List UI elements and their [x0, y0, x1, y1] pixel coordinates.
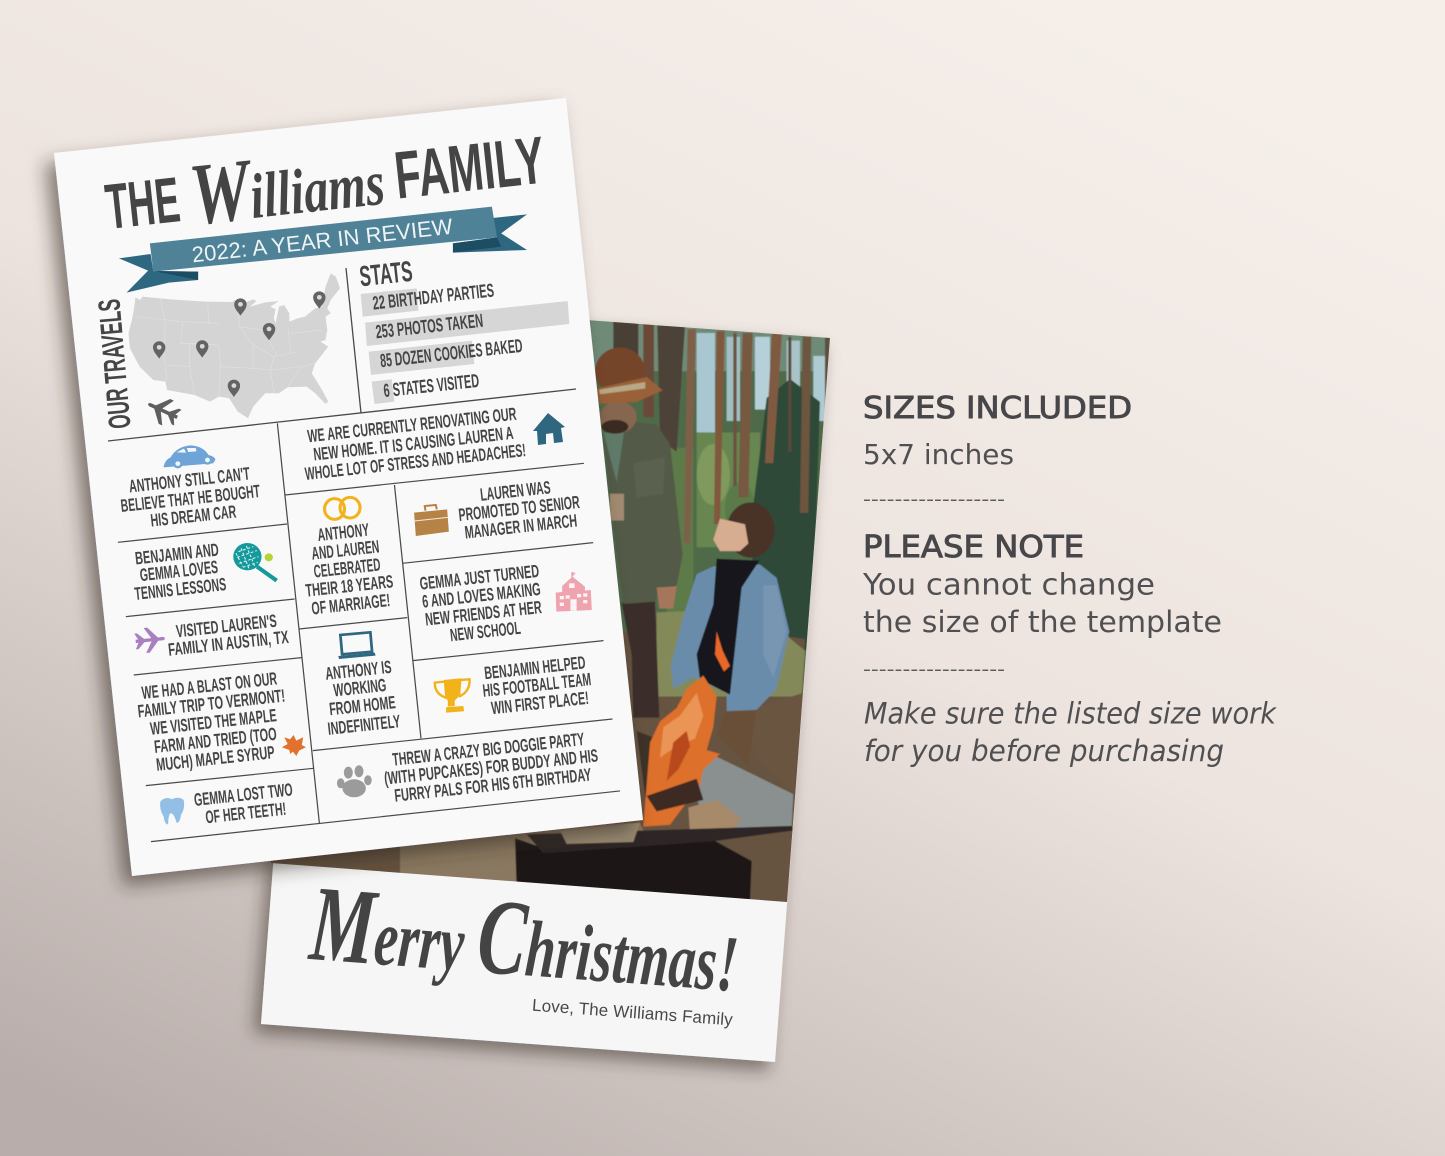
fact: Vermont: WE HAD A BLAST ON OUR: [141, 668, 278, 703]
front card: year in review: [54, 98, 643, 876]
icon: racket and ball: [233, 543, 277, 581]
fact: new school: NEW FRIENDS AT HER: [424, 597, 543, 630]
fact: dog birthday: [337, 729, 599, 806]
fact: football: WIN FIRST PLACE!: [490, 688, 590, 718]
dashed separator: ------------------: [863, 659, 1005, 679]
stat labels: 253 PHOTOS TAKEN: [375, 311, 484, 343]
fact: anniversary: ANTHONY: [317, 520, 370, 545]
fact: Vermont: FAMILY TRIP TO VERMONT!: [137, 686, 286, 721]
stat labels: 85 DOZEN COOKIES BAKED: [379, 336, 524, 372]
heading: sizes included: SIZES INCLUDED: [863, 391, 1132, 426]
fact: dream car: BELIEVE THAT HE BOUGHT: [120, 481, 261, 516]
man: [622, 599, 659, 718]
italic advice: Make sure the listed size work: [864, 696, 1277, 730]
fact: new school: 6 AND LOVES MAKING: [421, 579, 542, 612]
note text: [862, 568, 1222, 639]
fact: renovating: [304, 404, 527, 484]
map pins: [153, 291, 326, 397]
fact: lost teeth: GEMMA LOST TWO: [193, 779, 294, 810]
fact: tennis: [134, 540, 277, 604]
icon: house: [533, 413, 565, 445]
note text: the size of the template: [863, 605, 1222, 639]
fact: dog birthday: (WITH PUPCAKES) FOR BUDDY AND HIS: [383, 745, 599, 789]
stats panel: [358, 256, 569, 404]
fact: anniversary: THEIR 18 YEARS: [305, 571, 394, 601]
icon: school: [556, 573, 592, 612]
divider grid: [108, 268, 620, 842]
fact: promotion: PROMOTED TO SENIOR: [458, 492, 581, 525]
fact: dream car: HIS DREAM CAR: [150, 501, 237, 531]
fact: renovating: NEW HOME. IT IS CAUSING LAUREN A: [312, 423, 514, 465]
fact: Austin trip: [134, 611, 290, 660]
fact: anniversary: [305, 497, 394, 619]
fact: dog birthday: THREW A CRAZY BIG DOGGIE PARTY: [391, 729, 585, 770]
fact: football: BENJAMIN HELPED: [483, 652, 586, 683]
fact: Vermont: FARM AND TRIED (TOO: [153, 724, 278, 757]
fact: promotion: MANAGER IN MARCH: [464, 510, 578, 543]
US map with pins: [129, 273, 340, 418]
italic advice: [864, 696, 1277, 768]
ribbon banner: [119, 207, 527, 293]
stat labels: 6 STATES VISITED: [383, 371, 480, 402]
fact: promotion: [414, 477, 581, 543]
dashed separator: ------------------: [863, 489, 1005, 509]
fact: new school: NEW SCHOOL: [449, 618, 522, 645]
icon: tooth: [160, 798, 184, 824]
note text: You cannot change: [862, 568, 1155, 602]
fact: dream car: ANTHONY STILL CAN'T: [128, 464, 251, 497]
stat labels: 22 BIRTHDAY PARTIES: [372, 281, 495, 315]
photo: father and son by a campfire: [271, 320, 830, 902]
greeting: Merry Christmas: Merry Christmas!: [305, 864, 743, 1015]
card paper: [261, 300, 830, 1062]
heading: stats: STATS: [358, 256, 414, 293]
fact: anniversary: CELEBRATED: [313, 554, 381, 582]
fact: Vermont: [137, 668, 306, 775]
icon: maple leaf: [282, 735, 306, 756]
card paper: [54, 98, 643, 876]
fire pit and logs: [697, 756, 794, 828]
back card: Merry Christmas photo card: [261, 291, 867, 1062]
icon: paw: [337, 765, 372, 797]
fact: tennis: BENJAMIN AND: [134, 540, 220, 569]
fact: dog birthday: FURRY PALS FOR HIS 6TH BIRTHDAY: [393, 764, 592, 806]
fact: working from home: ANTHONY IS: [324, 657, 392, 684]
fact: new school: GEMMA JUST TURNED: [419, 561, 540, 594]
fact: football: HIS FOOTBALL TEAM: [482, 669, 592, 701]
fact: anniversary: AND LAUREN: [310, 536, 380, 564]
fact: anniversary: OF MARRIAGE!: [310, 590, 391, 619]
icon: purple plane: [134, 626, 166, 654]
title: Williams: [185, 127, 389, 244]
boy: [717, 708, 757, 765]
fact: working from home: WORKING: [332, 675, 387, 701]
icon: grey plane: [142, 391, 184, 430]
side notes: [862, 391, 1277, 768]
fire: [715, 631, 730, 672]
fact: Vermont: MUCH) MAPLE SYRUP: [155, 742, 276, 775]
fact: new school: [419, 561, 592, 645]
fact: working from home: [324, 632, 401, 739]
size value: 5x7 inches: [863, 438, 1014, 471]
stat labels: [372, 281, 524, 402]
fact: working from home: FROM HOME: [328, 692, 396, 719]
icon: rings: [325, 497, 360, 519]
title: THE: [102, 163, 183, 243]
icon: trophy: [435, 678, 470, 713]
stat bars: [361, 288, 569, 404]
icon: briefcase: [414, 505, 449, 536]
fact: football: [435, 652, 592, 718]
fact: lost teeth: OF HER TEETH!: [204, 799, 287, 827]
heading: our travels: OUR TRAVELS: [91, 298, 138, 430]
fact: Austin trip: FAMILY IN AUSTIN, TX: [167, 627, 290, 660]
icon: laptop: [338, 632, 376, 659]
title: FAMILY: [391, 123, 548, 214]
italic advice: for you before purchasing: [864, 734, 1224, 768]
fact: tennis: TENNIS LESSONS: [134, 574, 227, 604]
fact: lost teeth: [160, 779, 294, 827]
ribbon banner: 2022: A YEAR IN REVIEW: [191, 214, 454, 267]
ground: [267, 616, 805, 922]
fact: working from home: INDEFINITELY: [327, 711, 401, 739]
fact: dream car: [120, 445, 261, 531]
fact: Austin trip: VISITED LAUREN'S: [175, 611, 278, 641]
fact: Vermont: WE VISITED THE MAPLE: [149, 705, 278, 739]
fact: renovating: WHOLE LOT OF STRESS AND HEADACHES!: [304, 440, 527, 484]
fact: promotion: LAUREN WAS: [479, 477, 552, 505]
icon: car: [164, 445, 215, 468]
title: [102, 123, 548, 244]
fact: renovating: WE ARE CURRENTLY RENOVATING OUR: [306, 404, 517, 446]
signature: Love, The Williams Family: [531, 996, 734, 1029]
heading: please note: PLEASE NOTE: [863, 530, 1084, 565]
fact: tennis: GEMMA LOVES: [139, 557, 219, 585]
